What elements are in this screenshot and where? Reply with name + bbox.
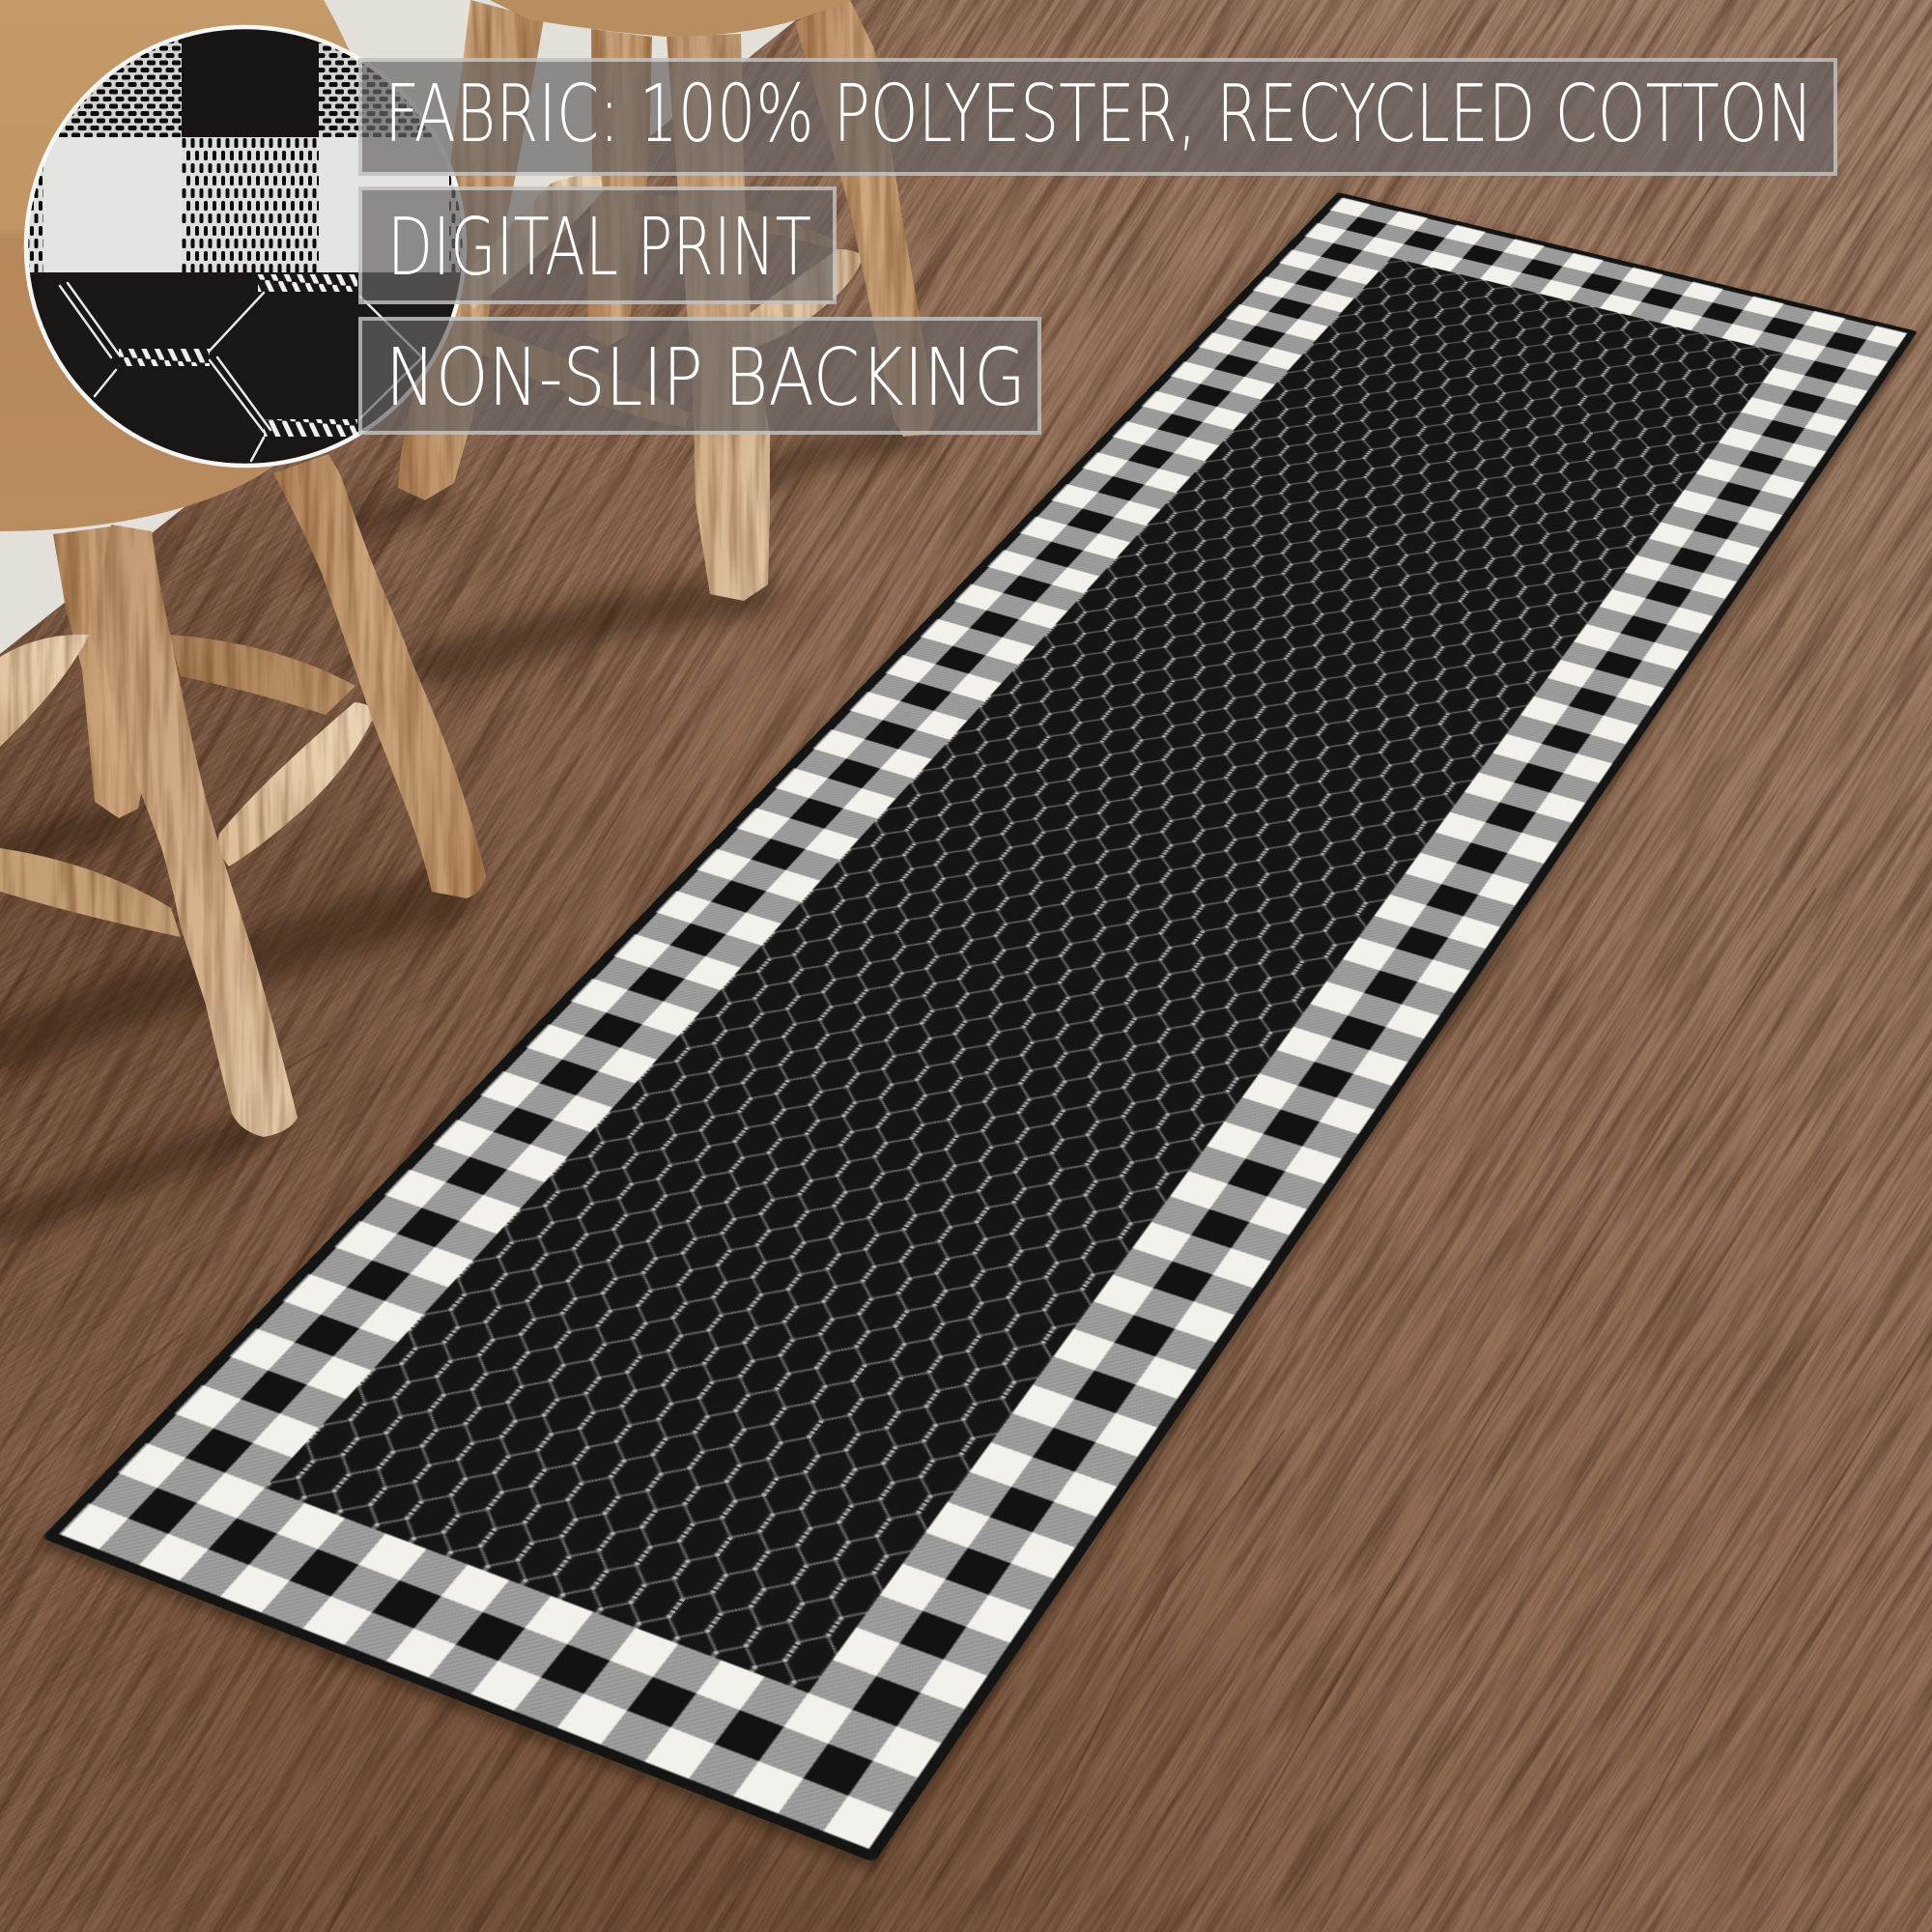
- label: digital print: [358, 186, 837, 304]
- front stool: [0, 0, 486, 1137]
- front stool rung: left light: [0, 635, 89, 747]
- front stool seat: [0, 0, 400, 531]
- fabric close-up lens: [19, 19, 473, 473]
- front stool leg: front: [95, 525, 298, 1137]
- label: non-slip backing: NON-SLIP BACKING: [385, 332, 1026, 424]
- callouts overlay: [23, 25, 1837, 468]
- honeycomb field: [265, 258, 1783, 1693]
- back stool leg: rear centre: [586, 29, 652, 346]
- front stool leg: back: [53, 526, 164, 818]
- back stool seat: [490, 0, 853, 37]
- back stool rung: upper right: [635, 193, 838, 248]
- front stool rung: lower left: [0, 848, 181, 937]
- front stool rung: right light: [218, 702, 375, 867]
- label: non-slip backing: [358, 317, 1041, 435]
- label: digital print: DIGITAL PRINT: [387, 202, 811, 294]
- front stool rung: dark back rung: [169, 635, 355, 715]
- back stool rung: left: [454, 175, 603, 309]
- back stool rung: lower left: [483, 328, 689, 428]
- chicken wire stitches: [60, 283, 422, 461]
- back stool: [398, 0, 936, 601]
- back stool leg: front centre: [667, 34, 770, 601]
- front stool leg: right: [273, 454, 486, 898]
- twisted wire rope stitches: [119, 274, 357, 437]
- back stool leg: right: [795, 0, 936, 437]
- wall and baseboard: [0, 0, 821, 654]
- back stool leg: far left: [398, 0, 544, 500]
- floor shadows cast by the stools: [0, 437, 913, 1227]
- back stool rung: lower right: [749, 249, 863, 348]
